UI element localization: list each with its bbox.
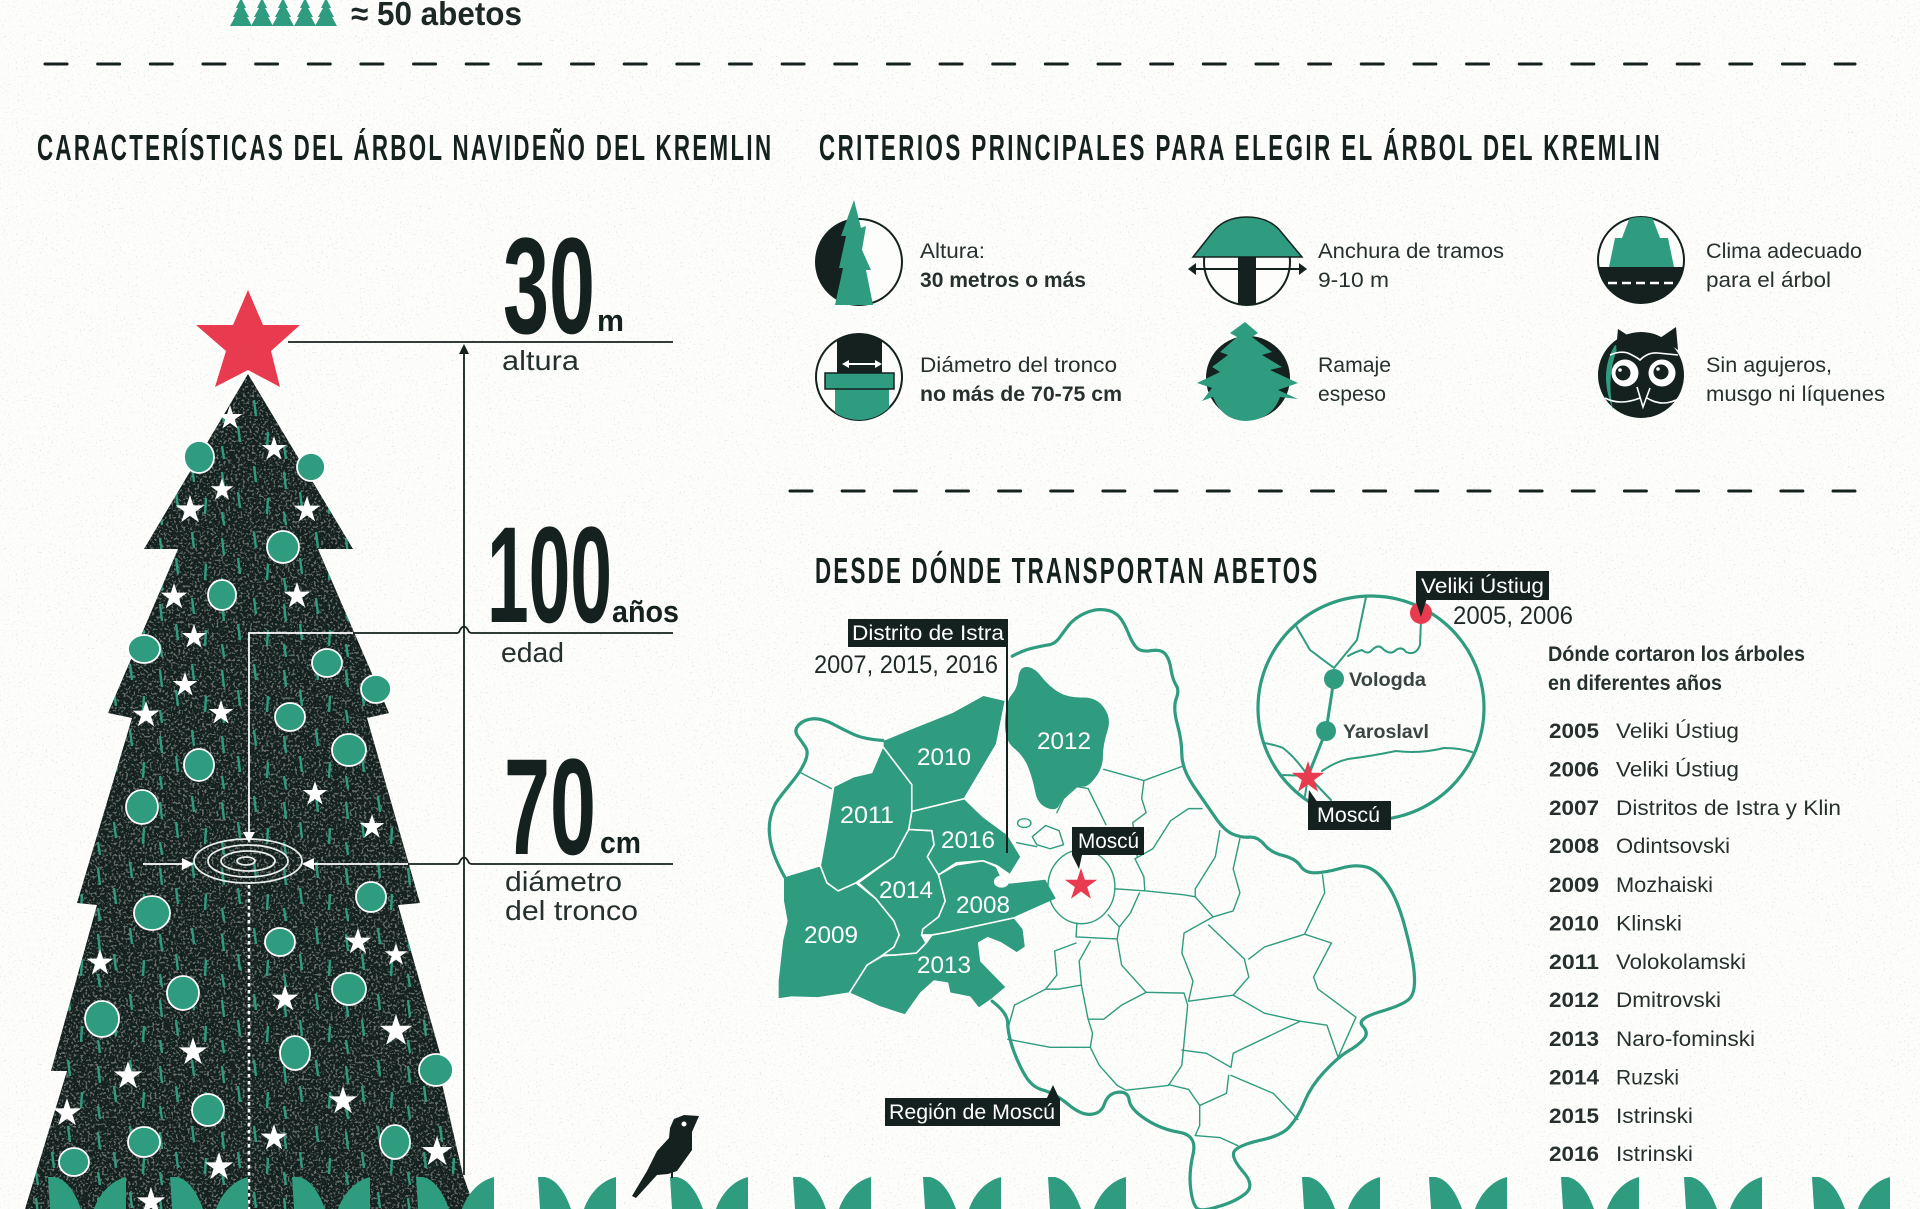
map label: Istra district <box>814 619 1008 853</box>
stat: trunk diameter: cm <box>600 825 641 860</box>
region labels <box>804 728 1091 979</box>
list: felling sites by year: Distritos de Istra y Klin <box>1616 797 1841 820</box>
region 2014 <box>858 829 945 955</box>
stat: trunk diameter: 70 <box>504 731 596 884</box>
outer boundary <box>769 610 1415 1209</box>
list heading: Dónde cortaron los árboles <box>1548 643 1805 666</box>
district borders <box>800 767 1356 1146</box>
inset label: Veliki Ustiug: 2005, 2006 <box>1453 602 1573 630</box>
icon: red star on top <box>196 290 300 387</box>
criterion: height: Altura: <box>920 240 985 263</box>
divider top <box>45 62 1855 66</box>
map label: Moscow region: Región de Moscú <box>889 1101 1055 1124</box>
measure: age rule <box>243 626 673 843</box>
inset map: route <box>1258 596 1484 820</box>
baubles <box>59 441 453 1176</box>
inset label: Veliki Ustiug <box>1416 571 1573 630</box>
list: felling sites by year: Odintsovski <box>1616 835 1730 858</box>
icon: branch width <box>1188 217 1307 305</box>
measure: height arrow <box>459 344 469 1175</box>
list: felling sites by year: Istrinski <box>1616 1105 1693 1128</box>
region 2016 <box>909 799 1021 875</box>
list: felling sites by year: 2005 <box>1549 720 1599 743</box>
icon: row of five firs <box>230 0 337 26</box>
icon: owl <box>1598 327 1684 418</box>
criterion: dense branches <box>1197 322 1391 421</box>
list: felling sites by year: Ruzski <box>1616 1066 1679 1090</box>
white stars <box>53 405 452 1209</box>
list: felling sites by year: Veliki Ústiug <box>1616 758 1739 782</box>
list heading <box>1548 643 1805 695</box>
list: felling sites by year: Klinski <box>1616 912 1682 936</box>
region labels: 2013 <box>917 952 971 979</box>
criterion: height: 30 metros o más <box>920 269 1086 292</box>
inset label: Veliki Ustiug: Veliki Ústiug <box>1421 575 1544 598</box>
measure: height rule <box>288 341 673 343</box>
criterion: climate <box>1596 217 1862 307</box>
map label: Istra district: 2007, 2015, 2016 <box>814 651 998 679</box>
list heading: en diferentes años <box>1548 672 1722 695</box>
list: felling sites by year: Veliki Ústiug <box>1616 720 1739 743</box>
region 2011 <box>820 746 912 891</box>
list: felling sites by year: 2007 <box>1549 797 1599 820</box>
criterion: trunk diameter: no más de 70-75 cm <box>920 383 1122 406</box>
list: felling sites by year: Dmitrovski <box>1616 989 1721 1012</box>
map label: Istra district: Distrito de Istra <box>852 622 1004 645</box>
list: felling sites by year: Naro-fominski <box>1616 1028 1755 1051</box>
tree body <box>25 374 470 1209</box>
region 2012 <box>1004 666 1110 810</box>
region labels: 2012 <box>1037 728 1091 755</box>
list: felling sites by year: 2009 <box>1549 874 1599 897</box>
dotted trunk line <box>248 885 250 1209</box>
christmas tree <box>25 290 470 1209</box>
region labels: 2016 <box>941 827 995 854</box>
region 2009 <box>778 866 899 999</box>
criterion: branch width: Anchura de tramos <box>1318 240 1504 263</box>
criterion: branch width <box>1188 217 1504 305</box>
stat: age: edad <box>501 637 564 668</box>
list: felling sites by year: 2016 <box>1549 1143 1599 1166</box>
stat: trunk diameter: diámetro <box>505 866 622 897</box>
region labels: 2011 <box>840 802 894 829</box>
list: felling sites by year: 2015 <box>1549 1105 1599 1128</box>
criterion: climate: Clima adecuado <box>1706 240 1862 263</box>
region labels: 2014 <box>879 877 933 904</box>
list: felling sites by year: Mozhaiski <box>1616 874 1713 897</box>
region 2010 <box>883 695 1006 811</box>
list: felling sites by year: 2008 <box>1549 835 1599 858</box>
icon: climate <box>1596 217 1686 307</box>
criterion: height <box>815 200 1086 306</box>
map label: Moscow region <box>885 1085 1060 1126</box>
list: felling sites by year: 2013 <box>1549 1028 1599 1051</box>
list: felling sites by year: 2010 <box>1549 912 1599 936</box>
criterion: dense branches: espeso <box>1318 383 1386 406</box>
trunk rings <box>194 839 302 883</box>
region labels: 2008 <box>956 892 1010 919</box>
heading: tree characteristics: CARACTERÍSTICAS DEL ÁRBOL NAVIDEÑO DEL KREMLIN <box>37 128 771 168</box>
criterion: healthy tree <box>1598 327 1885 418</box>
criterion: dense branches: Ramaje <box>1318 354 1391 377</box>
map: Moscow region <box>769 610 1415 1209</box>
stat: height: altura <box>502 345 579 376</box>
region labels: 2010 <box>917 744 971 771</box>
icon: height <box>815 200 902 306</box>
region labels: 2009 <box>804 922 858 949</box>
lake <box>994 876 1009 888</box>
criterion: healthy tree: Sin agujeros, <box>1706 354 1832 377</box>
list: felling sites by year: 2006 <box>1549 758 1599 782</box>
stat: height: m <box>597 303 624 338</box>
region 2013 <box>849 918 1026 1015</box>
list: felling sites by year <box>1549 720 1841 1166</box>
map marker: Moscow <box>1065 827 1144 899</box>
criterion: trunk diameter: Diámetro del tronco <box>920 354 1117 377</box>
icon: dense fir <box>1197 322 1298 421</box>
criterion: branch width: 9-10 m <box>1318 269 1389 292</box>
criterion: healthy tree: musgo ni líquenes <box>1706 383 1885 406</box>
list: felling sites by year: Istrinski <box>1616 1143 1693 1166</box>
icon: bird <box>632 1115 699 1198</box>
region 2008 <box>922 861 1057 935</box>
inset label: Yaroslavl: Yaroslavl <box>1343 722 1429 743</box>
stat: trunk diameter: del tronco <box>505 895 638 926</box>
stat: height: 30 <box>503 210 595 363</box>
measure: diameter rule <box>143 858 673 870</box>
icon: trunk diameter <box>816 333 902 422</box>
inset label: Moscow: Moscú <box>1317 804 1380 827</box>
ground leaves <box>48 1177 1890 1209</box>
list: felling sites by year: 2012 <box>1549 989 1599 1012</box>
heading: transport origin: DESDE DÓNDE TRANSPORTAN ABETOS <box>815 551 1317 591</box>
criterion: climate: para el árbol <box>1706 269 1831 292</box>
list: felling sites by year: 2011 <box>1549 951 1599 974</box>
heading: criteria: CRITERIOS PRINCIPALES PARA ELEGIR EL ÁRBOL DEL KREMLIN <box>819 128 1660 168</box>
stat: age: 100 <box>487 499 612 652</box>
list: felling sites by year: Volokolamski <box>1616 951 1746 974</box>
stat: age: años <box>612 594 679 629</box>
list: felling sites by year: 2014 <box>1549 1066 1599 1090</box>
map marker: Moscow: Moscú <box>1078 830 1139 853</box>
divider middle <box>790 490 1855 492</box>
inset label: Vologda: Vologda <box>1349 670 1426 691</box>
criterion: trunk diameter <box>816 333 1122 422</box>
inset label: Moscow <box>1308 790 1391 830</box>
